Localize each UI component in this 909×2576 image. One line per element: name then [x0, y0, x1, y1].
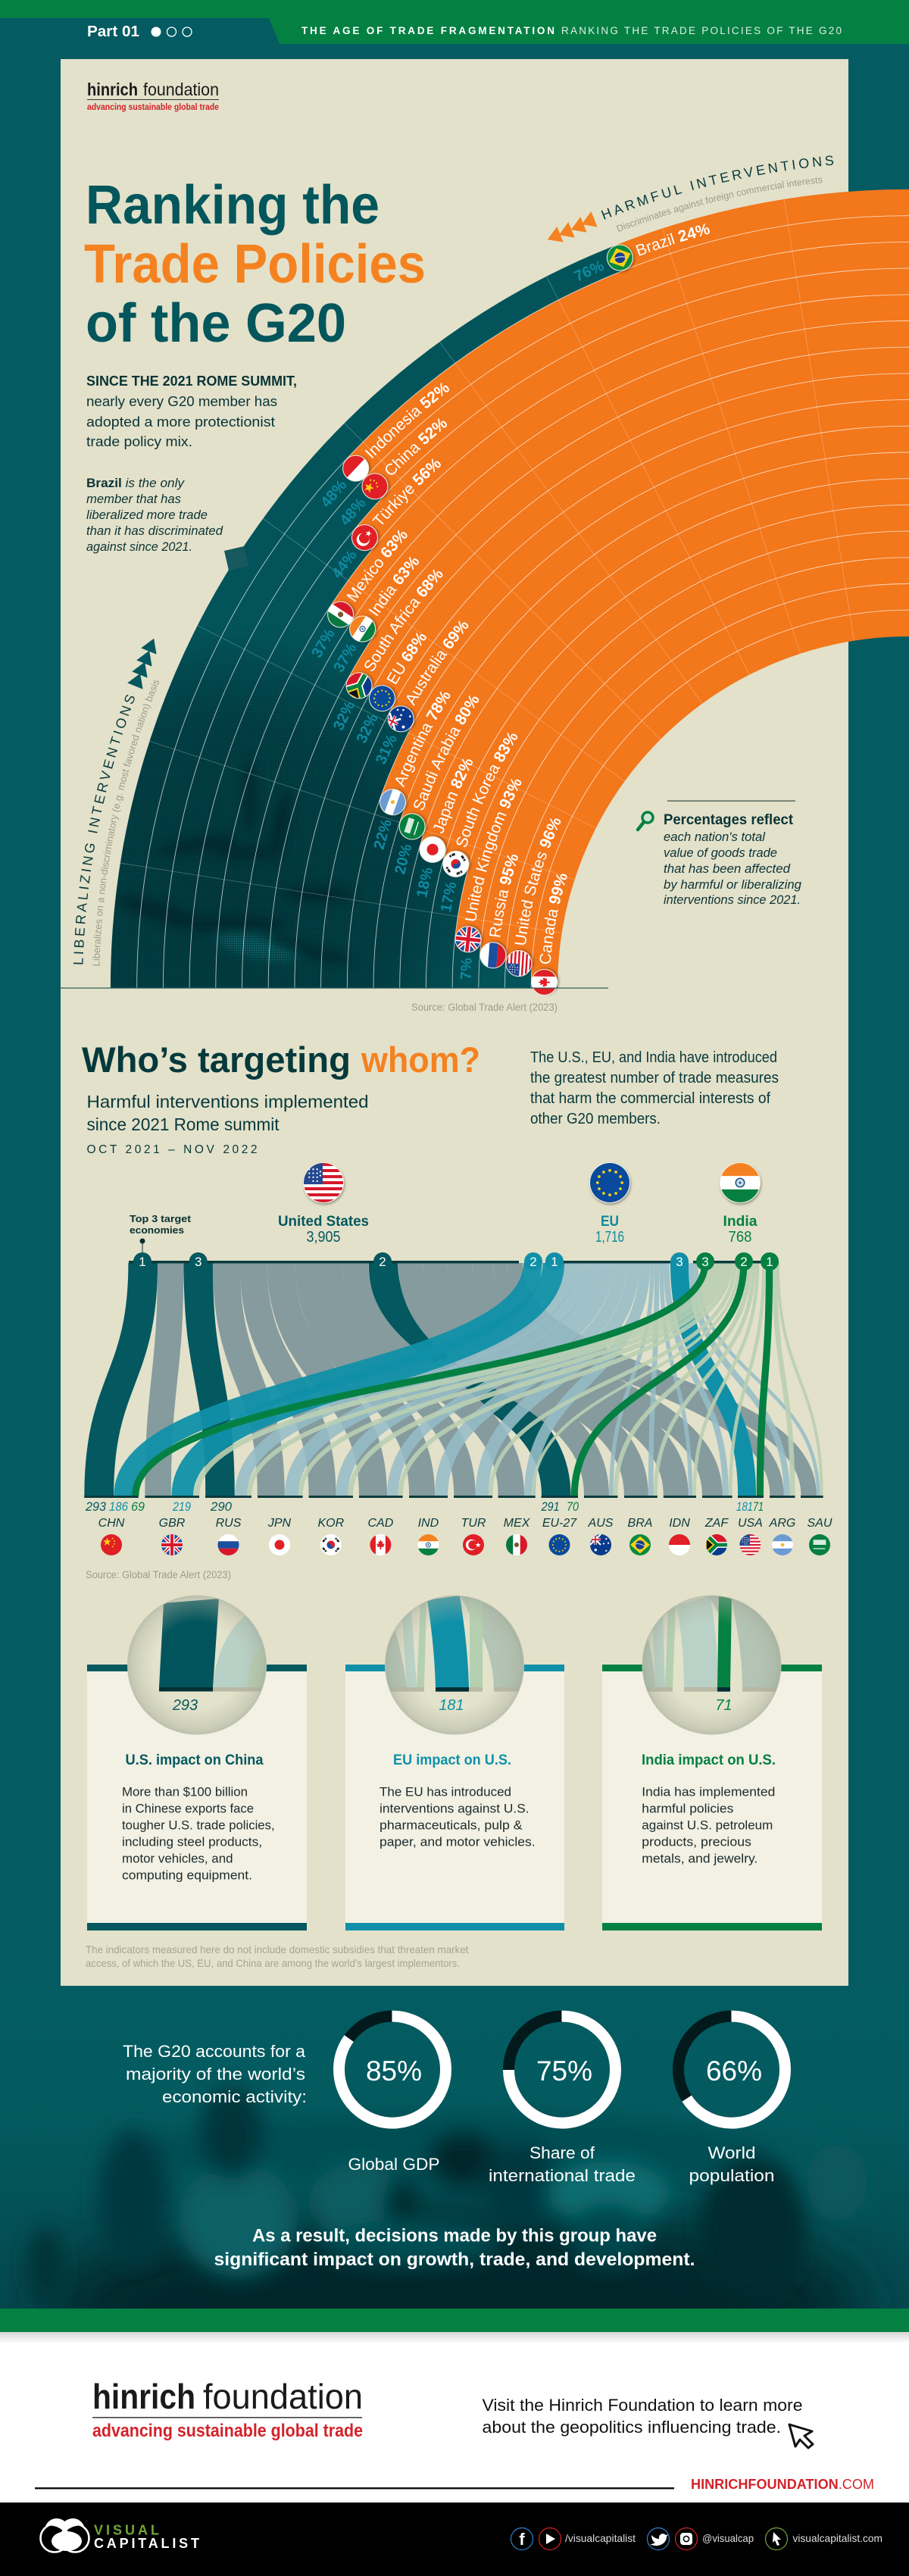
title: Ranking the [86, 175, 380, 236]
logo: Visual Capitalist: CAPITALIST [94, 2536, 199, 2551]
logo: hinrich foundation small: hinrich [87, 80, 138, 99]
ring entry: Argentina: Argentina 78% [395, 691, 450, 788]
target economy codes: GBR [159, 1517, 186, 1530]
target economy codes: IDN [669, 1517, 690, 1530]
ring entry: Australia [376, 621, 468, 764]
target economy codes: AUS [588, 1517, 614, 1530]
sankey subtitle [86, 1092, 368, 1156]
logo: hinrich foundation small [87, 80, 219, 112]
footnote [86, 1943, 469, 1969]
ring entry: United Kingdom: 7% [461, 958, 472, 979]
top banner [0, 0, 909, 44]
logo: hinrich foundation large: foundation [203, 2377, 363, 2416]
card: India impact on U.S.: India has implemented [642, 1785, 775, 1799]
card: India impact on U.S.: metals, and jewelry. [642, 1852, 758, 1865]
top-3 rank bubbles: 3 [195, 1255, 201, 1269]
top-3 flow values: 293 [85, 1499, 107, 1514]
Brazil note: liberalized more trade [86, 508, 208, 522]
source: EU: 1,716 [595, 1229, 624, 1246]
ring entry: China [342, 418, 447, 525]
logo: Visual Capitalist [41, 2518, 199, 2552]
heading: who's targeting whom: whom? [361, 1039, 480, 1080]
sankey subtitle: OCT 2021 – NOV 2022 [86, 1143, 258, 1156]
ring entry: India: 37% [334, 644, 356, 672]
EU other flows [241, 1263, 818, 1496]
ring entry: Argentina [374, 691, 450, 850]
donut: world population: population [689, 2166, 774, 2185]
liberalizing (dark) ring segments [123, 202, 909, 1774]
target economy codes: USA [738, 1517, 763, 1530]
G20 share intro: The G20 accounts for a [123, 2042, 306, 2061]
target economy codes: SAU [807, 1517, 832, 1530]
card: EU impact on U.S.: The EU has introduced [380, 1785, 511, 1799]
India top-3 flows [136, 1263, 770, 1496]
target economy flags [101, 1534, 830, 1555]
target economy codes: BRA [628, 1517, 652, 1530]
ring entry: Saudi Arabia: 20% [395, 845, 411, 874]
source: United States [278, 1162, 369, 1246]
source: India: India [723, 1214, 758, 1230]
intro text: trade policy mix. [86, 434, 192, 449]
card: U.S. impact on China: tougher U.S. trade policies, [122, 1818, 275, 1832]
target economy codes: EU-27 [542, 1517, 577, 1530]
target economy codes: RUS [216, 1517, 242, 1530]
top-3 rank bubbles: 2 [740, 1255, 748, 1269]
footer rule and website: HINRICHFOUNDATION.COM [691, 2477, 874, 2492]
heading: liberalizing interventions: Liberalizes on a non-discriminatory (e.g. most favored nation) basis [92, 680, 159, 966]
call to action [482, 2396, 803, 2437]
top-3 flow values: 71 [753, 1499, 764, 1514]
card: India impact on U.S.: harmful policies [642, 1802, 733, 1815]
top banner: RANKING THE TRADE POLICIES OF THE G20 [561, 25, 842, 36]
note: top 3 target economies [130, 1213, 192, 1255]
G20 share intro [123, 2042, 307, 2106]
ring entry: Japan [417, 758, 473, 897]
sankey description: the greatest number of trade measures [530, 1069, 779, 1086]
ring entry: Australia: Australia 69% [406, 621, 468, 706]
target economy codes: CHN [98, 1517, 125, 1530]
percentages note: that has been affected [664, 861, 791, 876]
donut: share of international trade: international trade [489, 2166, 636, 2185]
donut: global GDP: Global GDP [348, 2155, 439, 2174]
percentages note: by harmful or liberalizing [664, 877, 802, 892]
footnote: access, of which the US, EU, and China are among the world's largest implementors. [86, 1957, 460, 1969]
ring entry: Japan: 18% [417, 868, 433, 897]
logo: hinrich foundation large: advancing sustainable global trade [92, 2421, 363, 2441]
top-3 flow values: 291 [541, 1499, 560, 1514]
logo: Visual Capitalist: VISUAL [94, 2523, 159, 2538]
sankey description: The U.S., EU, and India have introduced [530, 1049, 777, 1066]
title: of the G20 [86, 293, 346, 354]
white sponsor panel [0, 2332, 909, 2503]
donut: world population: 66% [706, 2055, 762, 2087]
top-3 flow values [85, 1499, 764, 1514]
sankey description: other G20 members. [530, 1110, 661, 1127]
ring entry: India [334, 556, 419, 672]
Brazil note: Brazil is the only [86, 476, 186, 490]
ring entry: Türkiye [333, 458, 441, 578]
intro text: SINCE THE 2021 ROME SUMMIT, [86, 374, 297, 389]
card: U.S. impact on China: in Chinese exports face [122, 1802, 254, 1815]
social links: f [519, 2530, 525, 2549]
sankey subtitle: since 2021 Rome summit [86, 1114, 280, 1134]
call to action: about the geopolitics influencing trade. [482, 2418, 781, 2437]
band shadow [0, 2332, 909, 2343]
donut: share of international trade: Share of [529, 2143, 595, 2162]
card: U.S. impact on China: 293 [172, 1697, 198, 1714]
ring entry: Indonesia [323, 383, 449, 507]
logo: hinrich foundation small: advancing sustainable global trade [87, 102, 219, 112]
ring entry: Brazil [573, 224, 710, 281]
target economy codes: TUR [461, 1517, 486, 1530]
halftone photo texture on dark segments [111, 646, 465, 988]
logo: hinrich foundation large: hinrich [92, 2377, 195, 2416]
logo: hinrich foundation large [92, 2377, 363, 2441]
ring entry: South Africa: 32% [333, 702, 355, 730]
G20 share intro: majority of the world’s [126, 2065, 305, 2084]
top-3 rank bubbles: 3 [676, 1255, 683, 1269]
source: India [720, 1162, 761, 1246]
ring entry: Canada [531, 871, 571, 996]
ring entry: Saudi Arabia: Saudi Arabia 80% [414, 696, 479, 811]
ring entry: South Korea [441, 732, 518, 912]
ring entry: Russia: Russia 95% [489, 855, 518, 937]
card: U.S. impact on China: More than $100 billion [122, 1785, 248, 1799]
ring entry: South Africa: South Africa 68% [364, 569, 442, 671]
ring entry: Russia [479, 855, 518, 968]
card: U.S. impact on China: including steel products, [122, 1835, 262, 1849]
ring entry: Canada: Canada 99% [539, 874, 567, 964]
ring entry: India: India 63% [368, 556, 419, 617]
ring entry: Argentina: 22% [374, 820, 391, 850]
target economy codes: MEX [504, 1517, 531, 1530]
percentages note: interventions since 2021. [664, 893, 801, 907]
donut: share of international trade [489, 2016, 636, 2185]
chart baseline [61, 988, 608, 989]
card: India impact on U.S.: India impact on U.S. [642, 1752, 776, 1768]
ring entry: United Kingdom: United Kingdom 93% [465, 779, 521, 921]
social links: visualcapitalist.com [792, 2532, 882, 2544]
intro text: nearly every G20 member has [86, 394, 277, 409]
ring entry: Türkiye: Türkiye 56% [372, 458, 441, 524]
top-3 flow values: 186 [109, 1499, 128, 1514]
conclusion text [214, 2226, 695, 2270]
heading: who's targeting whom: Who’s targeting [82, 1039, 351, 1080]
notch marker on dark arc [224, 546, 248, 571]
target economy codes [98, 1517, 832, 1530]
ring entry: Mexico: 37% [312, 630, 334, 658]
card: EU impact on U.S. [345, 1591, 564, 1930]
ring entry: Saudi Arabia [395, 696, 479, 874]
ring entry: South Korea: 17% [441, 882, 456, 912]
ring entry: South Korea: South Korea 83% [456, 732, 518, 847]
sankey description [530, 1049, 779, 1127]
harmful (orange) ring segments [123, 202, 909, 1774]
ring entry: United Kingdom [454, 779, 521, 979]
percentages note: Percentages reflect [664, 812, 794, 828]
US top-3 flows [99, 1263, 556, 1496]
ring entry: Australia: 31% [376, 736, 397, 764]
source: EU: EU [601, 1214, 619, 1230]
top-3 flow values: 219 [172, 1499, 191, 1514]
card: EU impact on U.S.: 181 [439, 1697, 464, 1714]
sankey description: that harm the commercial interests of [530, 1089, 770, 1107]
radial ranking chart [111, 189, 909, 996]
card: India impact on U.S.: against U.S. petroleum [642, 1818, 773, 1832]
icon: cursor [789, 2424, 813, 2448]
donut: global GDP: 85% [366, 2055, 422, 2087]
top-3 flow values: 181 [736, 1499, 753, 1514]
heading: liberalizing interventions: LIBERALIZING INTERVENTIONS [73, 695, 135, 964]
card: EU impact on U.S.: paper, and motor vehicles. [380, 1835, 536, 1849]
note: top 3 target economies: economies [130, 1224, 184, 1236]
top-3 flow values: 290 [210, 1499, 233, 1514]
black footer [0, 2503, 909, 2576]
ring entry: Indonesia: Indonesia 52% [365, 383, 449, 458]
heading: harmful interventions: Discriminates against foreign commercial interests [617, 177, 823, 232]
note: top 3 target economies: Top 3 target [130, 1213, 192, 1224]
donut: world population [679, 2016, 785, 2185]
target economy codes: KOR [317, 1517, 345, 1530]
card: India impact on U.S. [602, 1591, 822, 1930]
ring entry: Brazil: 76% [573, 261, 604, 281]
top-3 rank bubbles: 1 [551, 1255, 558, 1269]
Brazil note [86, 476, 223, 554]
sankey source: Source: Global Trade Alert (2023) [86, 1569, 231, 1580]
top-3 flow values: 69 [131, 1499, 145, 1514]
ring entry: Brazil: Brazil 24% [636, 224, 710, 256]
percentages note [638, 800, 802, 907]
card: U.S. impact on China: computing equipment. [122, 1868, 252, 1882]
intro text: adopted a more protectionist [86, 414, 275, 430]
top banner: THE AGE OF TRADE FRAGMENTATION [301, 25, 554, 36]
Brazil note: member that has [86, 492, 181, 506]
percentages note: each nation's total [664, 830, 766, 844]
EU top-3 flows [123, 1263, 747, 1496]
top-3 rank bubbles: 1 [766, 1255, 773, 1269]
green band [0, 2309, 909, 2332]
card: EU impact on U.S.: interventions against U.S. [380, 1802, 529, 1815]
ring entry: China: China 52% [385, 418, 447, 475]
conclusion text: significant impact on growth, trade, and development. [214, 2249, 695, 2270]
ring entry: United States: United States 96% [515, 818, 561, 945]
top-3 flow values: 70 [567, 1499, 579, 1514]
target economy codes: CAD [368, 1517, 394, 1530]
ring entry: China: 48% [342, 499, 365, 525]
target economy codes: IND [418, 1517, 439, 1530]
ring entry: Türkiye: 44% [333, 551, 356, 578]
ring entry: Mexico [312, 530, 408, 658]
ring entry: EU: EU 68% [386, 633, 426, 685]
card: U.S. impact on China: motor vehicles, and [122, 1852, 233, 1865]
card: India impact on U.S.: 71 [715, 1697, 733, 1714]
ring entry: EU [357, 633, 426, 742]
top-3 rank bubbles: 2 [379, 1255, 386, 1269]
percentages note: value of goods trade [664, 846, 777, 860]
top-3 rank bubbles: 3 [701, 1255, 709, 1269]
footnote: The indicators measured here do not include domestic subsidies that threaten market [86, 1943, 469, 1955]
source: United States: United States [278, 1214, 369, 1230]
top banner: Part 01 [87, 23, 139, 40]
source: United States: 3,905 [306, 1229, 341, 1246]
conclusion text: As a result, decisions made by this group have [252, 2226, 657, 2246]
Brazil note: than it has discriminated [86, 524, 223, 538]
target economy codes: ARG [769, 1517, 795, 1530]
title: Trade Policies [84, 234, 426, 295]
US other flows [158, 1263, 809, 1496]
card: EU impact on U.S.: EU impact on U.S. [393, 1752, 511, 1768]
social links: /visualcapitalist [565, 2532, 636, 2544]
donut: global GDP [339, 2016, 445, 2174]
chart source: Source: Global Trade Alert (2023) [411, 1002, 558, 1013]
title [84, 175, 426, 354]
India other flows [196, 1263, 822, 1496]
card: U.S. impact on China: U.S. impact on China [126, 1752, 264, 1768]
ring entry: Indonesia: 48% [323, 480, 346, 507]
donut: share of international trade: 75% [536, 2055, 592, 2087]
intro text [86, 374, 297, 449]
ring entry: Mexico: Mexico 63% [347, 530, 408, 602]
crowd background photo [0, 2070, 909, 2309]
social links [511, 2528, 882, 2550]
heading: who's targeting whom [82, 1039, 480, 1080]
top-3 rank bubbles: 1 [139, 1255, 146, 1269]
card: India impact on U.S.: products, precious [642, 1835, 751, 1849]
source: India: 768 [729, 1229, 751, 1246]
sankey top bars [129, 1261, 779, 1264]
target economy codes: ZAF [704, 1517, 729, 1530]
arrows: harmful direction [545, 211, 598, 247]
source: EU [589, 1162, 630, 1246]
target economy codes: JPN [267, 1517, 292, 1530]
social links: @visualcap [702, 2532, 754, 2544]
panel: cream background [61, 59, 848, 1986]
sankey chart [99, 1263, 822, 1496]
card: EU impact on U.S.: pharmaceuticals, pulp & [380, 1818, 523, 1832]
G20 share intro: economic activity: [162, 2087, 307, 2106]
ring entry: EU: 32% [357, 714, 377, 742]
logo: hinrich foundation small: foundation [143, 80, 219, 99]
donut: world population: World [708, 2143, 756, 2162]
card: U.S. impact on China [87, 1596, 307, 1930]
top-3 rank bubbles [133, 1252, 779, 1271]
sankey subtitle: Harmful interventions implemented [86, 1092, 368, 1111]
ring entry: South Africa [333, 569, 442, 730]
Brazil note: against since 2021. [86, 539, 192, 554]
call to action: Visit the Hinrich Foundation to learn more [482, 2396, 803, 2415]
sankey bottom bars [84, 1496, 823, 1498]
arrows: liberalizing direction [127, 636, 161, 689]
ring entry: Japan: Japan 82% [433, 758, 473, 833]
top-3 rank bubbles: 2 [529, 1255, 537, 1269]
heading: harmful interventions: HARMFUL INTERVENTIONS [601, 156, 833, 220]
